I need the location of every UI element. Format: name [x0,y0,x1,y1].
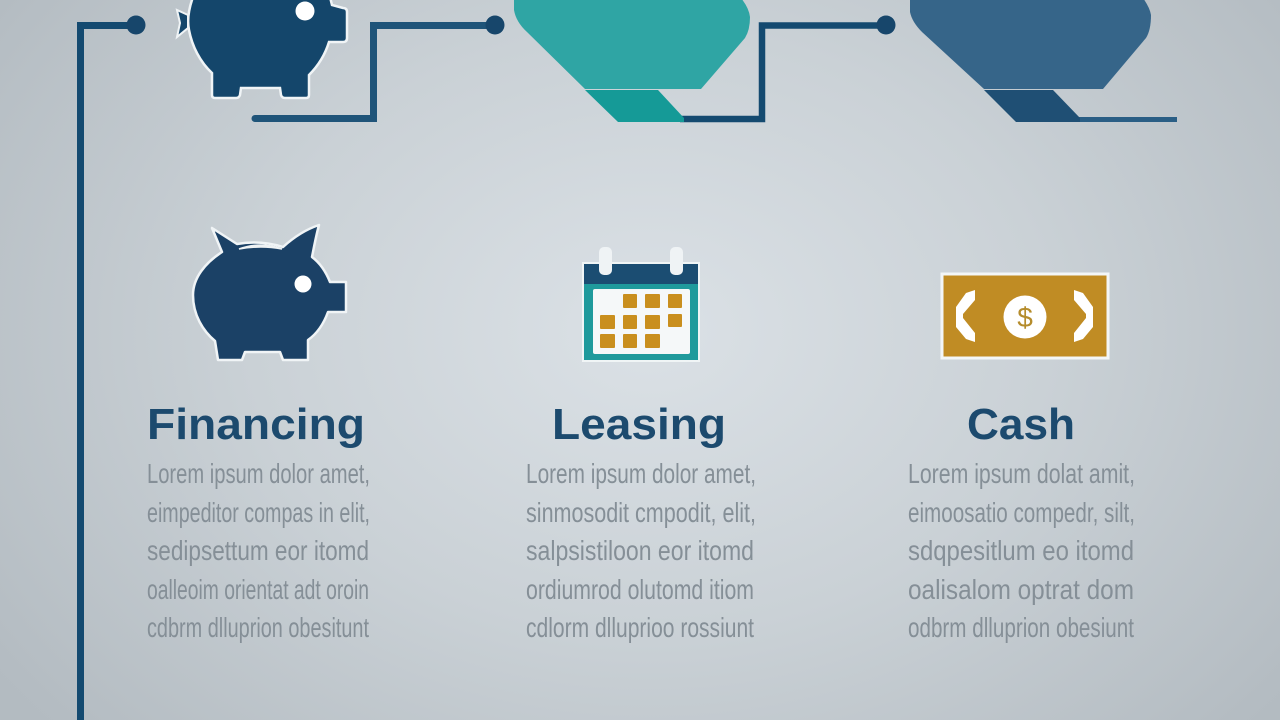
text: Cash description: odbrm dlluprion obesiunt [908,612,1134,643]
column: Financing [147,225,370,643]
icon: banknote: $ [1017,302,1033,333]
text: Leasing description: salpsistiloon eor itomd [526,535,754,566]
heading: Leasing: Leasing [552,400,726,449]
text: Cash description: eimoosatio compedr, silt, [908,497,1135,528]
text: Financing description: cdbrm dlluprion obesitunt [147,612,369,643]
text: Financing description: oalleoim orientat adt oroin [147,574,369,605]
text: Cash description: Lorem ipsum dolat amit, [908,458,1135,489]
text: Leasing description: ordiumrod olutomd itiom [526,574,754,605]
heading: Cash: Cash [967,400,1075,449]
column: Cash [908,274,1135,643]
icon: piggy bank [193,225,346,360]
text: Cash description: oalisalom optrat dom [908,574,1134,605]
connector: teal shape to blue shape [680,16,896,119]
text: Financing description: Lorem ipsum dolor amet, [147,458,370,489]
text: Leasing description [526,458,756,643]
text: Financing description [147,458,370,643]
text: Leasing description: cdlorm dlluprioo rossiunt [526,612,754,643]
text: Financing description: eimpeditor compas in elit, [147,497,370,528]
text: Leasing description: Lorem ipsum dolor amet, [526,458,756,489]
heading: Financing: Financing [147,400,365,449]
text: Financing description: sedipsettum eor itomd [147,535,369,566]
icon: banknote [942,274,1108,358]
icon: calendar [583,247,699,361]
icon: cropped blue hexagon [910,0,1151,122]
text: Leasing description: sinmosodit cmpodit, elit, [526,497,756,528]
connector: blue shape tail line [1075,117,1177,122]
connector: piggy bank to teal shape [255,16,504,118]
text: Cash description: sdqpesitlum eo itomd [908,535,1134,566]
icon: cropped piggy bank top [177,0,347,98]
icon: cropped teal hexagon [514,0,750,122]
column: Leasing [526,247,756,643]
text: Cash description [908,458,1135,643]
connector: left vertical line to first node [80,16,146,720]
